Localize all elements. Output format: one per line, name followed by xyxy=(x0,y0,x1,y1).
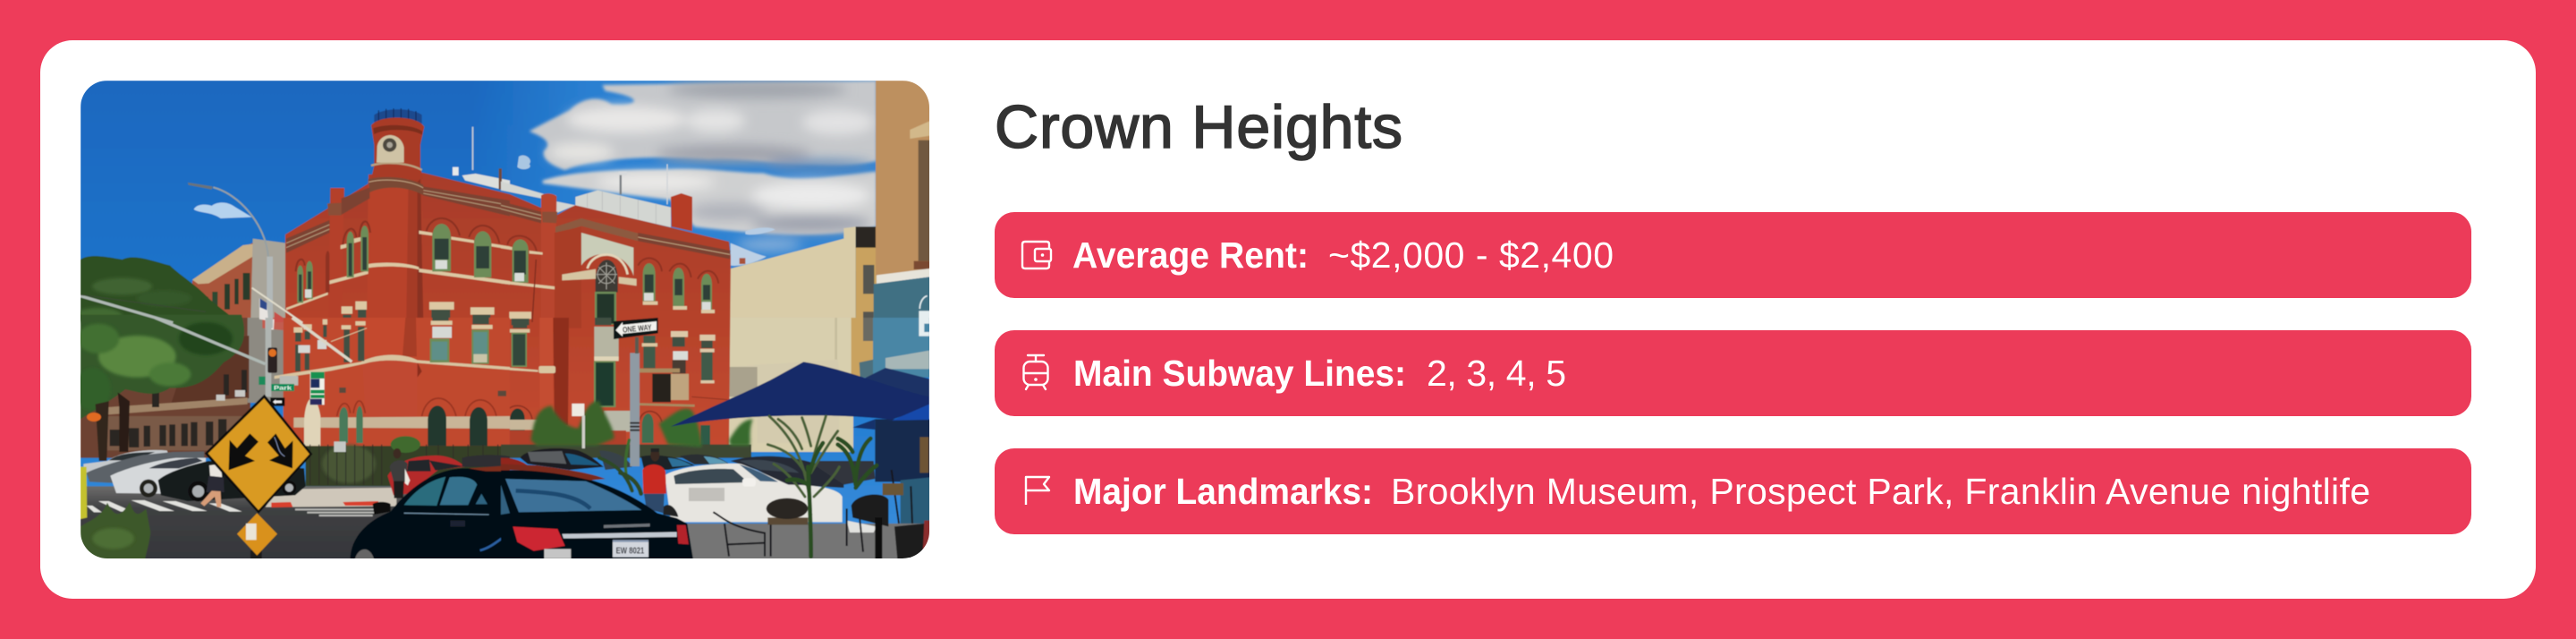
cream wall and tan building right xyxy=(729,81,932,331)
parked cars left xyxy=(83,450,510,501)
lower storey east xyxy=(501,318,727,446)
heading: Crown Heights: Crown Heights xyxy=(995,93,1402,161)
umbrellas and shopfront xyxy=(671,362,930,524)
main brick building body xyxy=(285,173,731,447)
iron fence and planting xyxy=(306,436,510,486)
info bar: average rent xyxy=(995,212,2471,298)
photo: red brick building in Crown Heights street scene: Park xyxy=(274,385,292,391)
background buildings left xyxy=(192,239,286,328)
turret tower xyxy=(329,107,425,319)
info bar: major landmarks xyxy=(995,448,2471,534)
patio palms and furniture xyxy=(599,416,930,559)
lamp post, signal arm, street signs, banner xyxy=(80,183,302,328)
white car xyxy=(662,464,843,522)
trees left xyxy=(80,256,229,324)
patio pavement xyxy=(686,521,930,559)
one way sign and signal pole: ONE WAY xyxy=(623,323,652,335)
label: average rent: Average Rent: xyxy=(1072,234,1309,276)
rooftop xyxy=(453,127,510,192)
icon: flag xyxy=(1026,477,1049,505)
photo: red brick building in Crown Heights street scene xyxy=(74,81,932,561)
photo: red brick building in Crown Heights street scene: EW 8021 xyxy=(616,546,645,556)
clouds xyxy=(512,81,877,268)
lower storey west xyxy=(262,318,510,446)
value: subway line numbers: 2, 3, 4, 5 xyxy=(1427,353,1566,394)
info bar: subway lines xyxy=(995,330,2471,416)
icon: tram xyxy=(1023,355,1048,389)
woman in red top xyxy=(642,447,667,514)
right wing cornice, stained glass, upper windows xyxy=(501,193,731,328)
roadside shrub xyxy=(80,502,150,561)
parked cars right xyxy=(501,448,875,488)
label: main subway lines: Main Subway Lines: xyxy=(1073,353,1406,394)
road and pavement xyxy=(80,485,408,558)
cornices, bands and upper windows west xyxy=(286,177,510,324)
foreground black sedan xyxy=(351,465,510,559)
pedestrians and yellow diamond warning sign xyxy=(80,395,410,559)
icon: wallet xyxy=(1022,242,1051,268)
small cloud in blue sky xyxy=(194,202,252,218)
label: major landmarks: Major Landmarks: xyxy=(1073,471,1373,512)
value: rent range: ~$2,000 - $2,400 xyxy=(1328,234,1614,276)
one way sign and signal pole xyxy=(614,318,689,466)
value: landmark list: Brooklyn Museum, Prospect Park, Franklin Avenue nightlife xyxy=(1391,471,2370,512)
